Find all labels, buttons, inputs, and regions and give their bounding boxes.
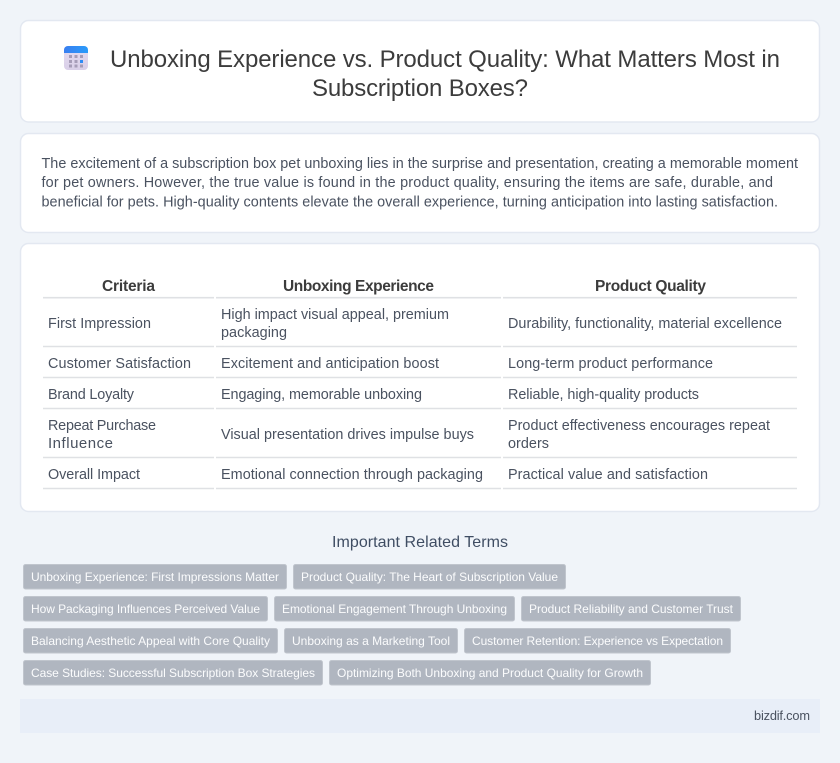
table row: Customer Satisfaction: [48, 356, 713, 372]
tag: Balancing Aesthetic Appeal with Core Quality: [31, 634, 270, 648]
tag: Case Studies: Successful Subscription Box Strategies: [31, 666, 315, 680]
panel: introduction: [20, 134, 820, 232]
title: Unboxing Experience vs. Product Quality: What Matters Most in: [110, 46, 780, 73]
panel: title card: [20, 20, 820, 122]
tag: [284, 628, 458, 653]
title: [110, 46, 780, 102]
tag: Product Reliability and Customer Trust: [529, 602, 734, 616]
icon: calendar: [64, 46, 88, 70]
table row: Brand Loyalty: Brand Loyalty: [48, 387, 135, 403]
table row: Overall Impact: [48, 467, 708, 483]
table row: Customer Satisfaction: Long-term product performance: [508, 356, 713, 372]
table row: First Impression: [48, 307, 782, 341]
table row: Repeat Purchase Influence: Influence: [48, 435, 113, 452]
tag: [24, 596, 268, 621]
tag: [24, 628, 278, 653]
tag: Unboxing as a Marketing Tool: [292, 634, 450, 648]
table row: Brand Loyalty: Reliable, high-quality products: [508, 387, 699, 403]
table row: Repeat Purchase Influence: orders: [508, 436, 549, 452]
tag: Unboxing Experience: First Impressions Matter: [31, 570, 279, 584]
tag: How Packaging Influences Perceived Value: [31, 602, 260, 616]
table row: Repeat Purchase Influence: [48, 418, 770, 452]
tag: [522, 596, 740, 621]
title: Subscription Boxes?: [312, 75, 528, 102]
table row: First Impression: packaging: [221, 325, 287, 341]
tag: Optimizing Both Unboxing and Product Quality for Growth: [337, 666, 643, 680]
table row: First Impression: High impact visual appeal, premium: [221, 307, 449, 323]
table row: Brand Loyalty: Engaging, memorable unboxing: [221, 387, 422, 403]
table row: Overall Impact: Practical value and satisfaction: [508, 467, 708, 483]
table row: Overall Impact: Overall Impact: [48, 467, 140, 483]
table row: First Impression: First Impression: [48, 316, 151, 332]
text block: introduction: The excitement of a subscription box pet unboxing lies in the surprise and presentation, creating a memorable moment: [42, 156, 798, 172]
tag: [24, 564, 286, 589]
table row: Customer Satisfaction: Customer Satisfaction: [48, 356, 191, 372]
table row: Repeat Purchase Influence: Product effectiveness encourages repeat: [508, 418, 770, 434]
footer: bizdif.com: [754, 708, 810, 723]
table row: Brand Loyalty: [48, 387, 699, 403]
tag: Customer Retention: Experience vs Expectation: [472, 634, 723, 648]
table row: Repeat Purchase Influence: Repeat Purchase: [48, 418, 156, 434]
text block: introduction: beneficial for pets. High-quality contents elevate the overall experience, turning anticipation into lasting satisfaction.: [42, 194, 778, 210]
table row: Repeat Purchase Influence: Visual presentation drives impulse buys: [221, 427, 474, 443]
tag: [294, 564, 566, 589]
related term tags: [24, 564, 740, 685]
table header: Unboxing Experience: [283, 278, 434, 295]
tag: [24, 660, 322, 685]
tag: Product Quality: The Heart of Subscription Value: [301, 570, 558, 584]
footer: [20, 699, 820, 733]
table header: [102, 278, 706, 295]
table row: Customer Satisfaction: Excitement and anticipation boost: [221, 356, 439, 372]
text block: introduction: [42, 156, 798, 210]
text block: introduction: for pet owners. However, the true value is found in the product quality, ensuring the items are safe, durable, and: [42, 175, 773, 191]
table row: First Impression: Durability, functionality, material excellence: [508, 316, 782, 332]
tag: [274, 596, 514, 621]
table row: Overall Impact: Emotional connection through packaging: [221, 467, 483, 483]
heading: related terms: Important Related Terms: [332, 534, 508, 551]
table header: Product Quality: [595, 278, 706, 295]
tag: [464, 628, 730, 653]
table header: Criteria: [102, 278, 155, 295]
panel: comparison table: [20, 244, 820, 512]
tag: Emotional Engagement Through Unboxing: [282, 602, 507, 616]
tag: [330, 660, 650, 685]
